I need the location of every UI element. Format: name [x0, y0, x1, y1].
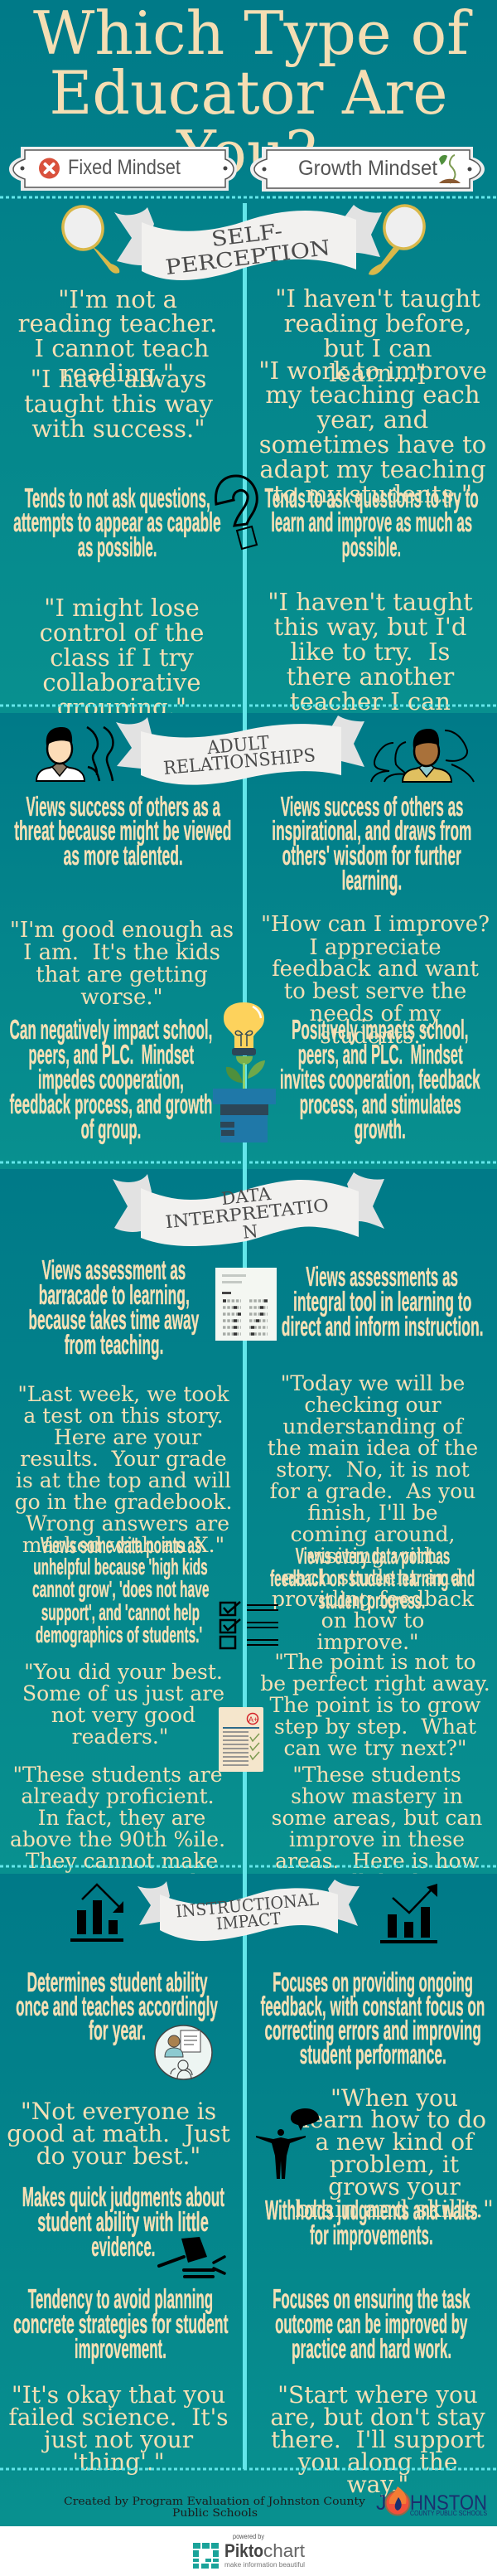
text: fixed quote science: "It's okay that you	[12, 2381, 225, 2409]
text: fixed quote proficient students: "These students are	[13, 1763, 222, 1787]
section background: data interpretation	[0, 1169, 497, 1874]
text: self-perception growth quote 2: "I work to improve	[258, 357, 487, 385]
title: Educator Are	[50, 58, 447, 128]
text: growth quote new problem: a new kind of	[315, 2128, 475, 2156]
text: self-perception growth quote 1: "I haven't taught	[275, 284, 480, 313]
text: avoids planning (fixed): Tendency to avoid planning	[28, 2283, 213, 2314]
text: assessment as barricade (fixed): from teaching.	[65, 1329, 164, 1360]
text: avoids planning (fixed): improvement.	[75, 2333, 166, 2364]
banner: data interpretation	[113, 1172, 384, 1246]
banner title: RELATIONSHIPS	[162, 745, 316, 779]
text: fixed quote on test: marked with an X."	[22, 1533, 224, 1557]
text: fixed quote good enough: I am. It's the kids	[23, 940, 220, 965]
icon: question mark	[216, 476, 257, 549]
text: fixed quote proficient students: already proficient.	[21, 1784, 215, 1808]
text: growth quote mastery: show mastery in	[291, 1784, 463, 1808]
text: avoids planning (fixed)	[13, 2283, 229, 2364]
text: growth quote point is to grow	[260, 1650, 490, 1760]
text: growth quote point is to grow: be perfect right away.	[260, 1671, 490, 1696]
text: growth quote on checking understanding: story. No, it is not	[276, 1458, 470, 1482]
label: growth mindset: Growth Mindset	[298, 157, 437, 180]
text: growth quote on checking understanding: the main idea of the	[268, 1436, 478, 1460]
banner title	[164, 1184, 330, 1243]
text: growth quote mastery: areas. Here is how	[275, 1849, 480, 1873]
text: fixed quote good enough: "I'm good enough as	[10, 918, 234, 943]
text: negative impact (fixed): feedback process, and growth	[10, 1089, 212, 1119]
text: growth quote new problem: brain and skills."	[295, 2195, 494, 2223]
text: growth quote on trying: there another	[287, 662, 454, 691]
text: self-perception growth quote 2: year, and	[316, 405, 428, 434]
text: views success (growth): learning.	[341, 865, 402, 895]
text: determines ability (fixed)	[16, 1967, 218, 2045]
text: growth quote point is to grow: can we try next?"	[283, 1736, 467, 1760]
text: growth quote on trying: "I haven't taught	[268, 588, 473, 616]
banner title: INTERPRETATIO	[164, 1196, 330, 1232]
banner: instructional impact	[138, 1880, 359, 1941]
text: determines ability (fixed): Determines student ability	[27, 1967, 208, 1997]
text: quick judgments (fixed): student ability with little	[37, 2206, 209, 2237]
text: growth quote new problem: problem, it	[330, 2151, 460, 2178]
powered by piktochart	[193, 2533, 305, 2569]
text: views success (fixed): as more talented.	[63, 840, 183, 871]
text: growth quote on checking understanding: visiting with	[307, 1544, 437, 1568]
logo: Johnston County Public Schools: COUNTY PUBLIC SCHOOLS	[410, 2510, 487, 2517]
text: growth quote mastery	[272, 1763, 482, 1894]
text: some data points unhelpful (fixed): support', and 'cannot help	[41, 1599, 200, 1625]
text: determines ability (fixed): once and teaches accordingly	[16, 1991, 218, 2021]
text: asks no questions (fixed): as possible.	[78, 531, 157, 562]
text: growth quote new problem: grows your	[328, 2173, 461, 2200]
text: fixed quote science: just not your	[41, 2426, 194, 2453]
text: growth quote new problem: "When you	[331, 2084, 458, 2112]
text: growth quote start where you are: you along the	[297, 2448, 457, 2476]
logo: Johnston County Public Schools: J	[376, 2491, 386, 2515]
text: growth quote start where you are: there. I'll support	[271, 2426, 485, 2453]
text: negative impact (fixed): of group.	[81, 1113, 141, 1144]
text: self-perception growth quote 2: sometimes have to	[259, 430, 486, 458]
text: growth quote start where you are: "Start where you	[277, 2381, 478, 2409]
text: negative impact (fixed)	[10, 1014, 212, 1144]
text: growth quote on checking understanding: checking our	[304, 1393, 442, 1417]
text: asks no questions (fixed)	[13, 483, 221, 562]
text: fixed quote good enough: that are getting	[36, 963, 208, 987]
text: self-perception fixed quote 1: "I'm not a	[58, 285, 177, 313]
text: growth quote start where you are: are, but don't stay	[270, 2404, 485, 2431]
text: fixed quote on test: "Last week, we took	[17, 1382, 229, 1406]
text: fixed quote math	[7, 2098, 230, 2170]
text: fixed quote on test: is at the top and will	[16, 1468, 231, 1492]
text: self-perception growth quote 2: to my students."	[273, 480, 472, 508]
logo icon	[193, 2543, 219, 2569]
text: self-perception fixed quote 1	[18, 285, 217, 387]
icon: gavel	[159, 2237, 224, 2278]
center divider line	[243, 203, 247, 2469]
footer credit: Public Schools	[172, 2507, 258, 2520]
footer credit	[64, 2496, 366, 2520]
text: growth quote mastery: some areas, but can	[272, 1806, 482, 1830]
text: some data points unhelpful (fixed)	[32, 1532, 210, 1647]
text: fixed quote proficient students: They cannot make	[26, 1849, 218, 1873]
banner: adult relationships	[116, 716, 364, 785]
text: growth quote how can I improve: "How can I improve?	[261, 912, 490, 937]
text: views success (growth)	[272, 791, 471, 895]
powered by piktochart: make information beautiful	[224, 2561, 305, 2569]
text: positive impact (growth)	[280, 1014, 480, 1144]
banner title: ADULT	[205, 733, 270, 759]
text: self-perception growth quote 2: my teaching each	[265, 381, 480, 409]
icon: teacher at board in circle	[155, 2025, 212, 2079]
text: fixed quote on grouping	[40, 594, 204, 721]
text: growth quote mastery: we will do that."	[291, 1870, 463, 1894]
text: assessment as tool (growth)	[282, 1261, 484, 1341]
icon: graded paper	[219, 1707, 263, 1772]
text: quick judgments (fixed): Makes quick judgments about	[22, 2181, 224, 2212]
text: fixed quote science: 'thing'."	[72, 2448, 165, 2476]
text: ongoing feedback (growth)	[260, 1967, 485, 2069]
text: fixed quote on grouping: "I might lose	[44, 594, 200, 622]
text: assessment as barricade (fixed): barracade to learning,	[39, 1279, 190, 1310]
text: views success (fixed): Views success of others as a	[26, 791, 220, 822]
footer credit: Created by Program Evaluation of Johnston County	[64, 2496, 366, 2508]
text: self-perception fixed quote 2	[24, 365, 214, 443]
icon: graded paper: A+	[248, 1715, 258, 1724]
text: growth quote on checking understanding: providing feedback	[272, 1587, 475, 1611]
title: Which Type of	[33, 0, 472, 68]
text: growth quote how can I improve: to best serve the	[284, 979, 466, 1004]
text: fixed quote good enough: worse."	[80, 985, 163, 1010]
plaque: growth mindset	[250, 147, 485, 192]
text: fixed quote on test: results. Your grade	[20, 1447, 227, 1471]
text: fixed quote proficient students: above the 90th %ile.	[10, 1827, 225, 1851]
text: growth quote on trying: teacher I can	[290, 687, 451, 716]
text: growth quote on checking understanding: each student and	[282, 1565, 463, 1589]
banner title: IMPACT	[215, 1909, 282, 1933]
text: assessment as barricade (fixed): because takes time away	[28, 1304, 200, 1335]
powered by piktochart: powered by	[233, 2533, 264, 2540]
plaque: fixed mindset	[9, 147, 237, 191]
icon: rising chart	[380, 1884, 437, 1943]
text: determines ability (fixed): for year.	[89, 2015, 146, 2045]
text: growth quote how can I improve: students."	[320, 1024, 431, 1049]
text: withholds judgment (growth)	[265, 2195, 478, 2250]
powered by piktochart: Pikto	[224, 2540, 263, 2561]
text: growth quote start where you are: way."	[347, 2471, 408, 2498]
text: growth quote start where you are	[270, 2381, 485, 2498]
text: fixed quote on grouping: class if I try	[50, 643, 194, 672]
text: self-perception fixed quote 2: taught this way	[24, 390, 214, 418]
text: fixed quote on grouping: grouping."	[57, 693, 186, 721]
banner title	[175, 1889, 320, 1933]
text: asks no questions (fixed): Tends to not ask questions,	[25, 483, 210, 513]
text: self-perception growth quote 1: learn..."	[329, 359, 427, 387]
text: every data point feedback (growth)	[270, 1543, 475, 1613]
logo: Johnston County Public Schools	[376, 2486, 487, 2517]
text: fixed quote good enough	[10, 918, 234, 1010]
icon: bubble answer sheet	[215, 1268, 277, 1341]
text: growth quote on checking understanding: understanding of	[282, 1414, 464, 1438]
text: quick judgments (fixed): evidence.	[91, 2231, 156, 2262]
text: growth quote on checking understanding: for a grade. As you	[270, 1479, 475, 1503]
text: quick judgments (fixed)	[22, 2181, 224, 2262]
section background: self-perception	[0, 0, 497, 713]
text: fixed quote on test: a test on this story.	[23, 1404, 224, 1428]
text: growth quote on checking understanding: coming around,	[291, 1522, 455, 1546]
text: fixed quote on test	[15, 1382, 232, 1557]
icon: sprout	[439, 155, 461, 183]
text: fixed quote you did your best: "You did your best.	[24, 1660, 223, 1684]
text: growth quote on checking understanding: "Today we will be	[281, 1371, 465, 1395]
icon: growth teacher with supportive colleagues	[371, 729, 474, 782]
text: self-perception growth quote 2	[258, 357, 487, 508]
text: growth quote mastery: improve in these	[289, 1827, 465, 1851]
section background: adult relationships	[0, 713, 497, 1169]
text: self-perception growth quote 2: adapt my teaching	[259, 455, 486, 483]
text: self-perception fixed quote 2: with success."	[31, 415, 205, 443]
text: growth quote how can I improve: needs of my	[310, 1002, 442, 1026]
text: some data points unhelpful (fixed): cannot grow', 'does not have	[32, 1576, 210, 1602]
text: fixed quote on grouping: collaborative	[42, 668, 201, 696]
text: avoids planning (fixed): concrete strategies for student	[13, 2308, 229, 2339]
text: self-perception growth quote 1: but I can	[323, 334, 432, 362]
icon: left hand mirror	[60, 203, 119, 274]
text: self-perception fixed quote 2: "I have always	[31, 365, 206, 393]
text: self-perception fixed quote 1: I cannot teach	[35, 334, 209, 362]
text: fixed quote on test: Here are your	[54, 1425, 201, 1449]
text: asks no questions (fixed): attempts to appear as capable	[13, 507, 221, 537]
text: fixed quote you did your best: not very good	[51, 1703, 195, 1727]
text: assessment as barricade (fixed)	[28, 1254, 200, 1360]
text: growth quote on trying: like to try. Is	[291, 638, 450, 666]
icon: right hand mirror	[369, 202, 427, 275]
text: self-perception growth quote 1: reading before,	[284, 309, 471, 337]
banner: self-perception	[114, 205, 382, 280]
text: views success (fixed): threat because might be viewed	[14, 815, 231, 846]
text: self-perception growth quote 1	[275, 284, 480, 387]
text: fixed quote you did your best: readers."	[72, 1725, 168, 1749]
text: growth quote on trying	[268, 588, 473, 740]
banner title: N	[242, 1221, 259, 1243]
text: fixed quote proficient students: any more growth."	[24, 1870, 220, 1894]
banner title	[164, 219, 331, 279]
text: fixed quote proficient students: In fact, they are	[38, 1806, 205, 1830]
text: self-perception fixed quote 1: reading."	[61, 359, 174, 387]
text: growth quote on checking understanding: improve."	[316, 1630, 419, 1654]
icon: fixed teacher with shadow colleagues	[36, 727, 113, 781]
text: growth quote point is to grow: The point is to grow	[270, 1693, 481, 1717]
banner title: SELF-	[210, 219, 284, 251]
text: negative impact (fixed): impedes cooperation,	[38, 1064, 184, 1094]
text: fixed quote on grouping: control of the	[40, 619, 204, 647]
text: asks questions (growth): possible.	[341, 531, 401, 562]
text: some data points unhelpful (fixed): Views some data points as	[41, 1532, 201, 1558]
text: fixed quote science: failed science. It's	[8, 2404, 229, 2431]
text: task outcome (growth)	[273, 2283, 470, 2364]
text: growth quote how can I improve	[261, 912, 490, 1049]
title: You?	[176, 118, 317, 187]
icon: declining chart	[70, 1885, 123, 1942]
banner title: PERCEPTION	[164, 235, 331, 279]
text: fixed quote science	[8, 2381, 229, 2476]
logo: Johnston County Public Schools: HNSTON	[410, 2491, 487, 2515]
text: growth quote on trying: this way, but I'd	[274, 613, 466, 641]
text: fixed quote math: do your best."	[36, 2142, 200, 2170]
text: growth quote new problem: learn how to do	[302, 2106, 486, 2133]
text: growth quote mastery: "These students	[292, 1763, 461, 1787]
text: some data points unhelpful (fixed): unhelpful because 'high kids	[33, 1554, 208, 1579]
text: fixed quote on test: go in the gradebook.	[15, 1490, 232, 1514]
text: growth quote on checking understanding	[268, 1371, 478, 1654]
text: growth quote how can I improve: I appreciate	[309, 935, 442, 960]
text: growth quote on checking understanding: on how to	[321, 1608, 424, 1632]
text: growth quote on trying: ask for help?"	[287, 712, 454, 740]
text: fixed quote proficient students	[10, 1763, 225, 1894]
icon: light bulb growing from pot	[213, 1002, 276, 1142]
banner title: DATA	[220, 1184, 273, 1209]
text: growth quote new problem	[295, 2084, 494, 2223]
text: growth quote how can I improve: feedback and want	[272, 957, 479, 982]
text: fixed quote math: "Not everyone is	[21, 2098, 216, 2125]
text: negative impact (fixed): peers, and PLC. Mindset	[28, 1039, 194, 1070]
text: assessment as barricade (fixed): Views assessment as	[41, 1254, 186, 1285]
icon: red x	[39, 158, 60, 179]
icon: checklist	[220, 1602, 278, 1648]
text: growth quote on checking understanding: finish, I'll be	[307, 1501, 438, 1525]
text: fixed quote you did your best	[22, 1660, 224, 1749]
text: fixed quote you did your best: Some of us just are	[22, 1681, 224, 1705]
text: growth quote point is to grow: "The point is not to	[274, 1650, 476, 1674]
section background: instructional impact	[0, 1874, 497, 2526]
powered by piktochart: chart	[263, 2540, 305, 2561]
banner title: INSTRUCTIONAL	[175, 1889, 320, 1921]
text: asks questions (growth)	[265, 483, 479, 562]
text: negative impact (fixed): Can negatively impact school,	[10, 1014, 212, 1045]
label: fixed mindset: Fixed Mindset	[68, 156, 181, 179]
text: positive impact (growth): growth.	[355, 1113, 406, 1144]
icon: person with brain	[256, 2108, 319, 2179]
text: some data points unhelpful (fixed): demographics of students.'	[36, 1622, 202, 1647]
text: growth quote point is to grow: step by step. What	[274, 1715, 476, 1739]
text: fixed quote math: good at math. Just	[7, 2120, 230, 2147]
title	[33, 0, 472, 187]
text: self-perception fixed quote 1: reading teacher.	[18, 309, 217, 337]
text: views success (fixed)	[14, 791, 231, 871]
text: fixed quote on test: Wrong answers are	[26, 1511, 229, 1535]
